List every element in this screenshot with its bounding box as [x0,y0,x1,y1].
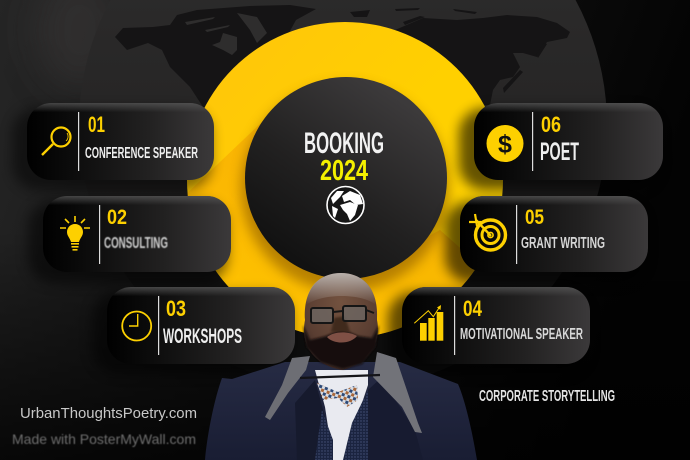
label: CONSULTING [104,235,168,252]
number 05: 05 [525,206,544,229]
center circle [245,77,447,279]
neck strap [300,375,380,378]
number 04: 04 [463,296,483,321]
number 03: 03 [166,296,186,321]
label: CONFERENCE SPEAKER [85,145,198,162]
label: WORKSHOPS [163,325,242,348]
number 01: 01 [88,112,105,137]
vest left [315,410,333,460]
icon: target [469,214,506,250]
long shadow of the inner circle [180,84,485,340]
website url: UrbanThoughtsPoetry.com [20,405,197,422]
jacket [205,362,477,460]
icon: clock [122,312,151,340]
large globe panel [79,0,607,389]
number 06: 06 [541,112,561,137]
icon: magnifier [42,128,70,155]
jacket front panel right [368,378,423,460]
bow tie [317,383,358,407]
title: booking: BOOKING [304,127,384,160]
title: year: 2024 [320,155,368,187]
shirt [315,370,368,460]
yellow ring [180,22,503,340]
card 06: poet [474,103,663,180]
card 05: grant writing [460,196,648,272]
vest right [343,390,368,460]
backpack strap right [373,352,422,433]
world map silhouette [115,5,570,110]
scalp highlight [306,273,376,305]
icon: growth chart [414,305,443,341]
icon: light bulb [60,216,90,251]
label: GRANT WRITING [521,235,605,252]
portrait of the speaker [205,273,477,460]
number 02: 02 [107,206,127,229]
glasses [311,306,374,323]
beard [303,325,379,369]
label: POET [540,138,579,166]
head [304,273,378,370]
lips [327,332,357,343]
card 02: consulting [43,196,231,272]
nose shadow [331,316,350,332]
card 03: workshops [107,287,295,364]
backpack strap left [265,356,310,420]
card shadows [12,108,659,374]
jacket front panel left [295,380,325,460]
label: MOTIVATIONAL SPEAKER [460,326,583,343]
watermark: Made with PosterMyWall.com [12,431,196,447]
icon: globe [327,186,364,224]
map details: hudson bay and baffin [185,13,267,55]
card 01: conference speaker [27,103,214,180]
icon: dollar coin: $ [498,130,512,158]
icon: dollar coin [486,125,524,162]
card 04: motivational speaker [402,287,590,364]
